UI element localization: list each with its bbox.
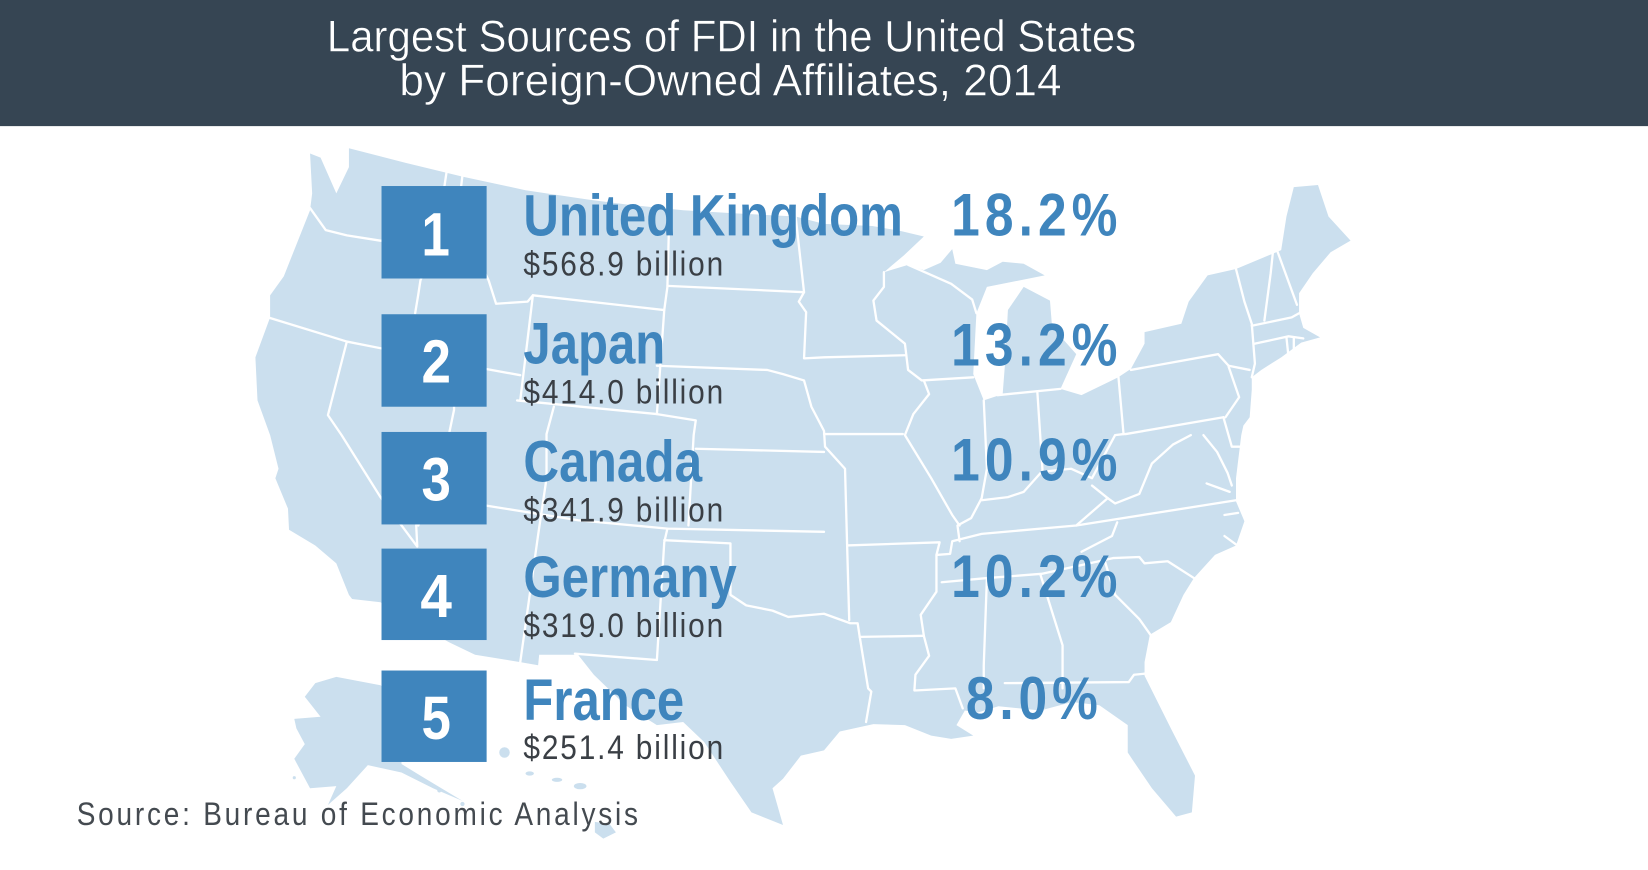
map: United States: [255, 148, 1351, 839]
row 4: Germany: [382, 542, 1117, 644]
rank box 2: [382, 314, 487, 407]
title: [327, 12, 1136, 106]
rank box 4: 4: [420, 562, 452, 630]
rank box 5: 5: [421, 684, 451, 752]
share: 13.2%: [951, 311, 1117, 379]
rank box 2: 2: [421, 328, 451, 396]
row 3: Canada: [382, 426, 1117, 529]
country name: France: [523, 668, 684, 733]
rank box 3: 3: [421, 445, 451, 513]
country name: Germany: [523, 545, 737, 610]
rank box 5: [382, 671, 487, 762]
value: $319.0 billion: [523, 606, 723, 644]
share: 8.0%: [966, 664, 1098, 732]
title: by Foreign-Owned Affiliates, 2014: [399, 57, 1062, 106]
value: $341.9 billion: [523, 490, 723, 529]
map: contiguous states landmass: [255, 148, 1351, 825]
value: $568.9 billion: [523, 244, 723, 283]
share: 10.2%: [951, 542, 1117, 610]
value: $251.4 billion: [523, 728, 723, 766]
map: state borders: [268, 171, 1303, 722]
rank box 4: [382, 549, 487, 640]
row 2: Japan: [382, 311, 1117, 411]
country name: United Kingdom: [523, 183, 903, 248]
row 1: United Kingdom: [382, 181, 1117, 283]
country name: Canada: [523, 429, 703, 494]
header panel: [0, 0, 1648, 126]
rank box 3: [382, 432, 487, 524]
country name: Japan: [523, 312, 665, 377]
rank box 1: 1: [421, 200, 450, 268]
value: $414.0 billion: [523, 372, 723, 411]
map: Alaska: [294, 677, 462, 805]
map: Hawaii and islands: [293, 747, 616, 839]
rank box 1: [382, 186, 487, 279]
title: Largest Sources of FDI in the United States: [327, 12, 1136, 61]
share: 18.2%: [951, 181, 1117, 248]
row 5: France: [382, 664, 1098, 766]
share: 10.9%: [951, 426, 1117, 493]
source note: Source: Bureau of Economic Analysis: [77, 796, 638, 833]
